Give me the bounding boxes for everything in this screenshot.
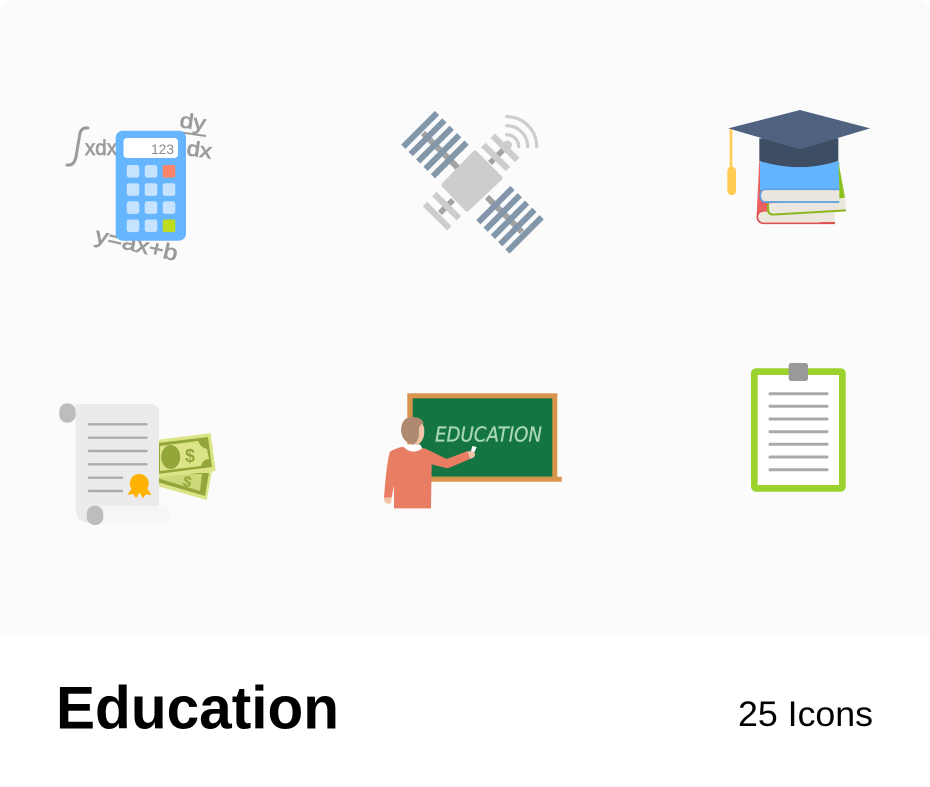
icon: teacher at chalkboard: [384, 393, 562, 508]
icon: calculator with formulas: xdx: [85, 137, 117, 160]
icon: clipboard: [751, 363, 846, 492]
icon: satellite: [403, 113, 542, 252]
icon: teacher at chalkboard: EDUCATION: [435, 423, 542, 447]
money: $: [181, 473, 194, 492]
icon: calculator with formulas: dy: [178, 109, 208, 136]
icon: diploma scroll and money: [59, 403, 216, 525]
icon: calculator with formulas: 123: [151, 141, 174, 157]
seal: [127, 474, 152, 498]
icon: calculator with formulas: [67, 109, 214, 266]
title: Education: [56, 674, 339, 742]
icon: calculator with formulas: y=ax+b: [93, 223, 180, 266]
icon: calculator with formulas: dx: [185, 137, 214, 164]
teacher: [384, 417, 477, 508]
money: [150, 433, 216, 500]
icon count: 25 Icons: [738, 695, 873, 734]
money: $: [185, 446, 195, 466]
icon: graduation cap on books: [727, 110, 870, 224]
